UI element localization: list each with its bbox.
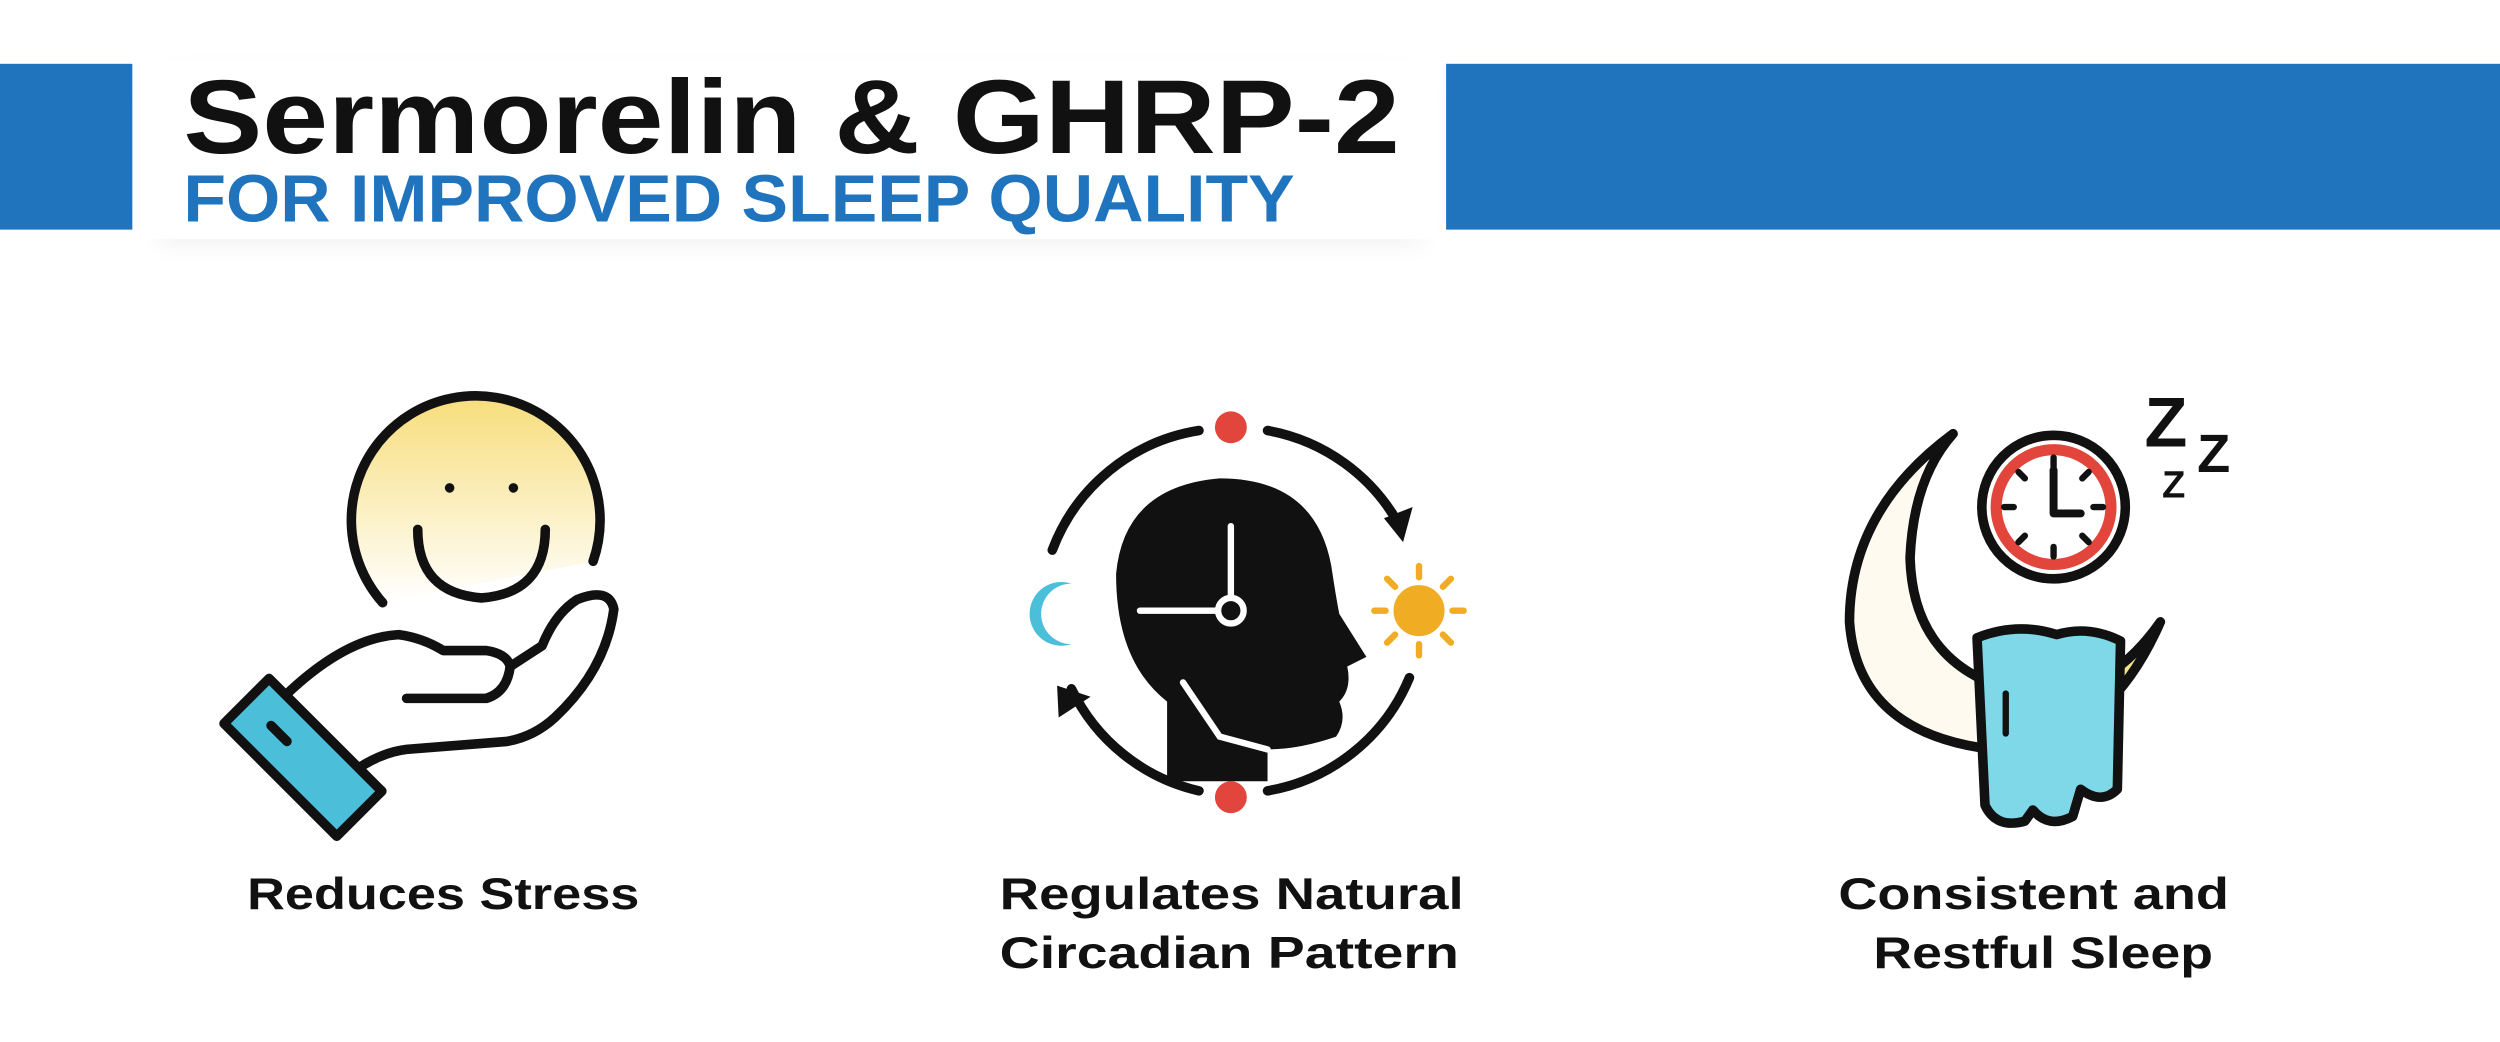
- label: circadian: Regulates Natural: [1000, 870, 1464, 919]
- title: [183, 59, 1400, 237]
- icon: zzz: Z: [2162, 463, 2185, 506]
- icon: smiley in hand: [224, 396, 614, 836]
- header bar left: [0, 64, 132, 230]
- header bar right: [1446, 64, 2500, 230]
- label: restful sleep: Consistent and: [1838, 870, 2229, 919]
- label: reduces stress: Reduces Stress: [247, 870, 639, 919]
- icon: zzz: Z: [2144, 382, 2187, 461]
- header shadow: [159, 80, 1419, 239]
- title: Sermorelin & GHRP-2: [183, 59, 1400, 176]
- icon: zzz: Z: [2197, 424, 2230, 484]
- icon: zzz: [2144, 382, 2230, 506]
- title: FOR IMPROVED SLEEP QUALITY: [183, 162, 1295, 237]
- label: circadian: [1000, 870, 1464, 978]
- label: restful sleep: [1838, 870, 2229, 978]
- icon: moon clock blanket: [1849, 434, 2160, 823]
- label: restful sleep: Restful Sleep: [1873, 929, 2213, 978]
- icon: circadian head: [1030, 411, 1464, 813]
- label: circadian: Circadian Pattern: [1000, 929, 1459, 978]
